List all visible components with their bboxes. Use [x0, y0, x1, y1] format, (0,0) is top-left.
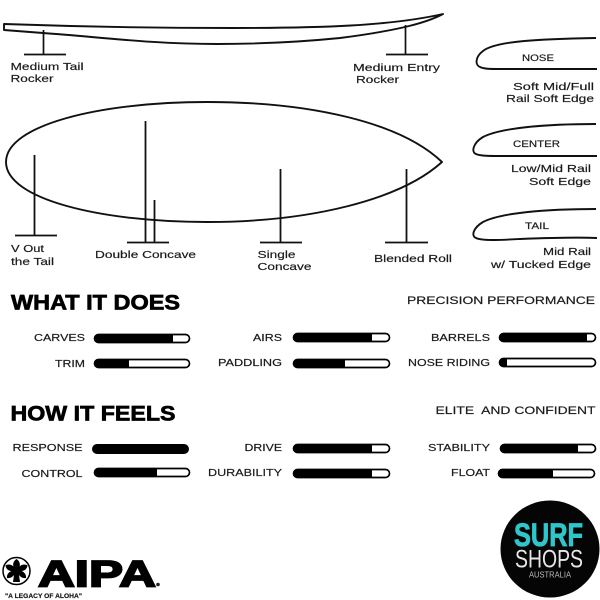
rating: durability [208, 468, 390, 479]
center description line 2: Soft Edge [529, 176, 591, 188]
aipa wordmark: AIPA [38, 554, 156, 594]
heading: how it feels: HOW IT FEELS [10, 402, 176, 426]
tail description line 2: w/ Tucked Edge [490, 259, 591, 271]
rail diagram: tail [473, 209, 597, 271]
label: double concave: Double Concave [95, 249, 196, 261]
rail diagram: center [473, 124, 597, 188]
nose title: NOSE [522, 53, 554, 64]
aipa tagline: "A LEGACY OF ALOHA" [5, 593, 82, 600]
rating: barrels [431, 333, 596, 344]
rating: stability [428, 443, 596, 454]
rating: control [22, 468, 190, 480]
label: v out the tail: V Out [11, 243, 44, 255]
rating: paddling: PADDLING [218, 358, 282, 369]
rating: durability: DURABILITY [208, 468, 282, 479]
rating: trim: TRIM [55, 359, 85, 370]
rating: stability: STABILITY [428, 443, 490, 454]
rating: airs: AIRS [253, 333, 282, 344]
tagline: elite and confident: ELITE AND CONFIDENT [436, 405, 596, 417]
rating: carves [34, 333, 190, 344]
rating: float [451, 468, 594, 479]
rating: barrels: BARRELS [431, 333, 490, 344]
label: entry rocker second line: Rocker [356, 74, 400, 86]
label: medium tail rocker: Medium Tail [10, 61, 84, 73]
rating: nose riding [408, 358, 596, 369]
label: medium entry rocker: Medium Entry [353, 62, 441, 74]
rating: response [12, 443, 189, 454]
label: tail rocker second line: Rocker [10, 73, 54, 85]
rating: control: CONTROL [22, 469, 83, 480]
australia wordmark: AUSTRALIA [529, 570, 572, 580]
rocker profile diagram [4, 14, 443, 86]
rating: trim [55, 359, 190, 370]
registered mark [156, 583, 160, 586]
tail title: TAIL [525, 221, 549, 232]
label: blended roll: Blended Roll [374, 253, 452, 265]
rating: nose riding: NOSE RIDING [408, 358, 490, 369]
logo: surf shops australia [500, 500, 600, 598]
shops wordmark: SHOPS [515, 546, 583, 574]
rail diagram: nose [477, 38, 597, 105]
label: v out second line: the Tail [11, 256, 54, 268]
center description line 1: Low/Mid Rail [511, 163, 591, 175]
rating: paddling [218, 358, 390, 369]
tagline: precision performance: PRECISION PERFORMANCE [407, 295, 595, 307]
rating: float: FLOAT [451, 468, 490, 479]
rating: drive [244, 443, 390, 454]
surf wordmark: SURF [514, 517, 583, 553]
label: single: Single [258, 249, 296, 261]
center title: CENTER [513, 139, 560, 150]
rating: response: RESPONSE [12, 443, 83, 454]
icon: aipa flower emblem [3, 558, 30, 584]
heading: what it does: WHAT IT DOES [11, 292, 180, 314]
rating: airs [253, 333, 390, 344]
nose description line 1: Soft Mid/Full [513, 81, 594, 93]
rating: drive: DRIVE [244, 443, 282, 454]
nose description line 2: Rail Soft Edge [506, 93, 594, 105]
tail description line 1: Mid Rail [543, 246, 591, 258]
logo: aipa [3, 554, 160, 600]
label: concave: Concave [258, 261, 312, 273]
rating: carves: CARVES [34, 333, 85, 344]
board outline diagram [6, 102, 452, 273]
